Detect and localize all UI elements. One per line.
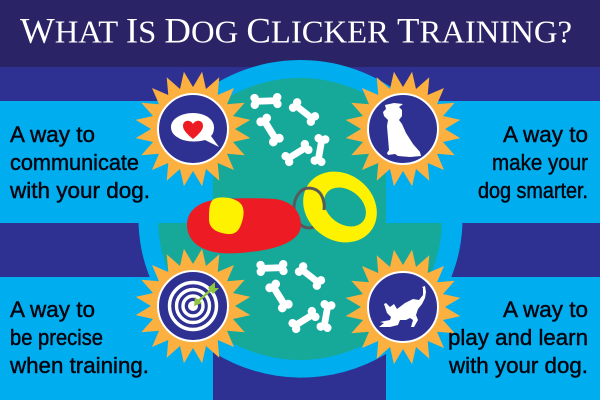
text: communicate: with your dog.	[9, 178, 150, 203]
text: smarter: A way to	[503, 122, 588, 147]
icon: heart	[183, 121, 203, 139]
bottom centre navy block	[213, 352, 386, 400]
central light blue circle	[138, 60, 462, 378]
text: precise	[9, 297, 149, 378]
sun badge: dog with graduation cap	[346, 72, 460, 186]
lower bones group	[256, 260, 336, 335]
text: precise: when training.	[9, 353, 149, 378]
yellow clicker button	[209, 197, 244, 234]
text: communicate	[9, 122, 150, 203]
text: communicate: communicate	[10, 150, 139, 175]
upper bones group	[250, 93, 330, 168]
icon: sitting dog	[383, 103, 421, 157]
text: smarter: dog smarter.	[478, 178, 588, 203]
header banner	[0, 0, 600, 67]
gray ring top arc	[301, 188, 324, 210]
panel: top right	[386, 101, 600, 223]
yellow ring handle	[289, 157, 391, 257]
text: precise: A way to	[10, 297, 95, 322]
icon: speech bubble	[171, 113, 219, 147]
icon: green arrow	[194, 282, 219, 306]
text: play and learn: with your dog.	[448, 353, 588, 378]
central teal circle	[158, 78, 442, 360]
panel: bottom right	[386, 277, 600, 400]
red clicker body	[187, 198, 301, 253]
text: communicate: A way to	[10, 122, 95, 147]
title: WHAT IS DOG CLICKER TRAINING?	[20, 10, 572, 50]
sun badge: target and arrow	[136, 249, 250, 363]
panel: bottom left	[0, 277, 213, 400]
sun badge: chat with heart	[136, 72, 250, 186]
icon: target rings	[170, 282, 216, 330]
icon: play bow dog	[379, 286, 426, 327]
text: play and learn: play and learn	[448, 325, 588, 350]
text: play and learn	[448, 297, 588, 378]
clicker toy	[187, 157, 391, 257]
text: smarter: make your	[492, 150, 588, 175]
panel: top left	[0, 101, 213, 223]
gray key ring	[294, 188, 324, 228]
text: play and learn: A way to	[503, 297, 588, 322]
text: smarter	[478, 122, 588, 203]
sun badge: playing dog	[346, 250, 460, 364]
text: precise: be precise	[10, 325, 103, 350]
